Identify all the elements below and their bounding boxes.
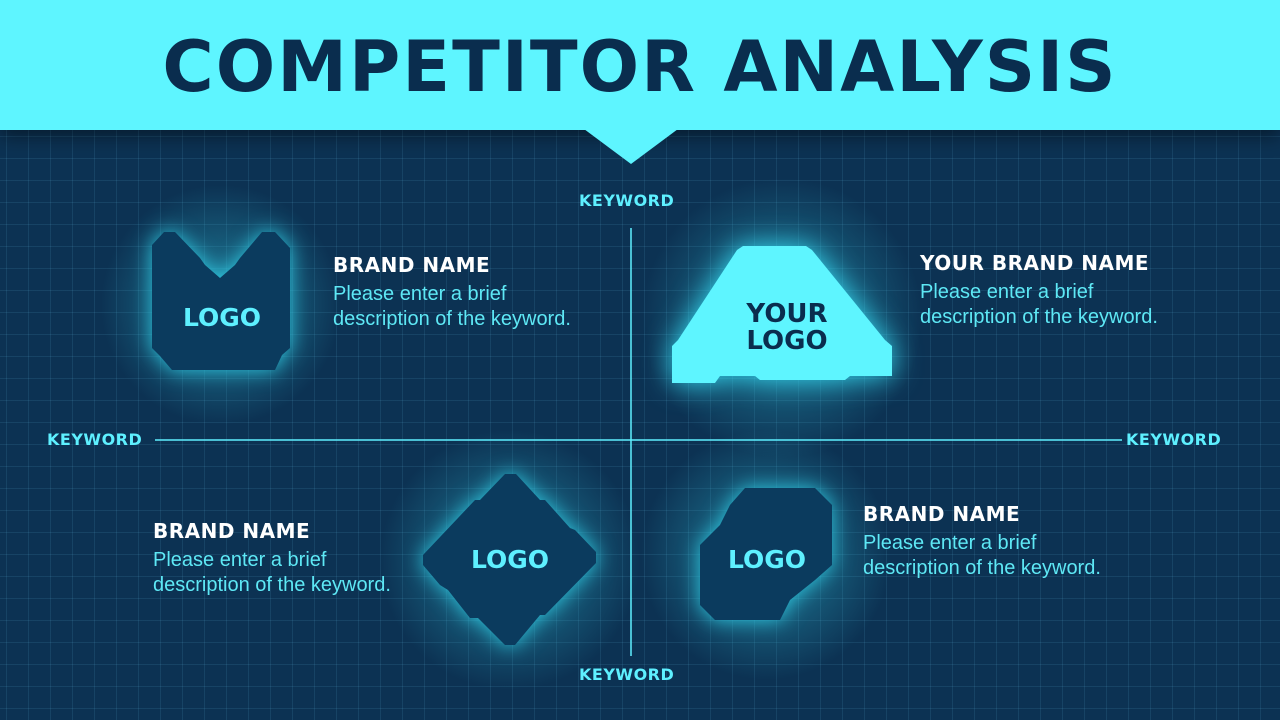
text: your brand: description of the keyword. [920, 306, 1158, 328]
text: brand 3: Please enter a brief [153, 549, 326, 571]
text: brand 4: BRAND NAME [863, 502, 1020, 526]
logo 4: LOGO [728, 545, 806, 574]
logo: your logo: YOUR [745, 299, 828, 329]
keyword top: KEYWORD [579, 191, 674, 210]
text: your brand: Please enter a brief [920, 281, 1093, 303]
text: brand 1: BRAND NAME [333, 253, 490, 277]
text: your brand [920, 251, 1158, 328]
text: brand 3: description of the keyword. [153, 574, 391, 596]
text: brand 3: BRAND NAME [153, 519, 310, 543]
title: COMPETITOR ANALYSIS [162, 26, 1118, 108]
text: your brand: YOUR BRAND NAME [920, 251, 1149, 275]
keyword right: KEYWORD [1126, 430, 1221, 449]
axis: vertical [630, 228, 632, 656]
axis: horizontal [155, 439, 1122, 441]
logo 3: diamond [423, 474, 596, 645]
text: brand 1 [333, 253, 571, 330]
logo 3: diamond: LOGO [471, 545, 549, 574]
logo 1 [152, 232, 290, 370]
keyword left: KEYWORD [47, 430, 142, 449]
text: brand 4 [863, 502, 1101, 579]
text: brand 4: Please enter a brief [863, 532, 1036, 554]
keyword bottom: KEYWORD [579, 665, 674, 684]
text: brand 1: description of the keyword. [333, 308, 571, 330]
text: brand 3 [153, 519, 391, 596]
logo 4 [700, 488, 832, 620]
logo 1: LOGO [183, 303, 261, 332]
header banner [0, 0, 1280, 130]
logo: your logo: LOGO [746, 326, 828, 356]
text: brand 4: description of the keyword. [863, 557, 1101, 579]
logo: your logo [672, 246, 892, 383]
header pointer [584, 129, 678, 164]
text: brand 1: Please enter a brief [333, 283, 506, 305]
